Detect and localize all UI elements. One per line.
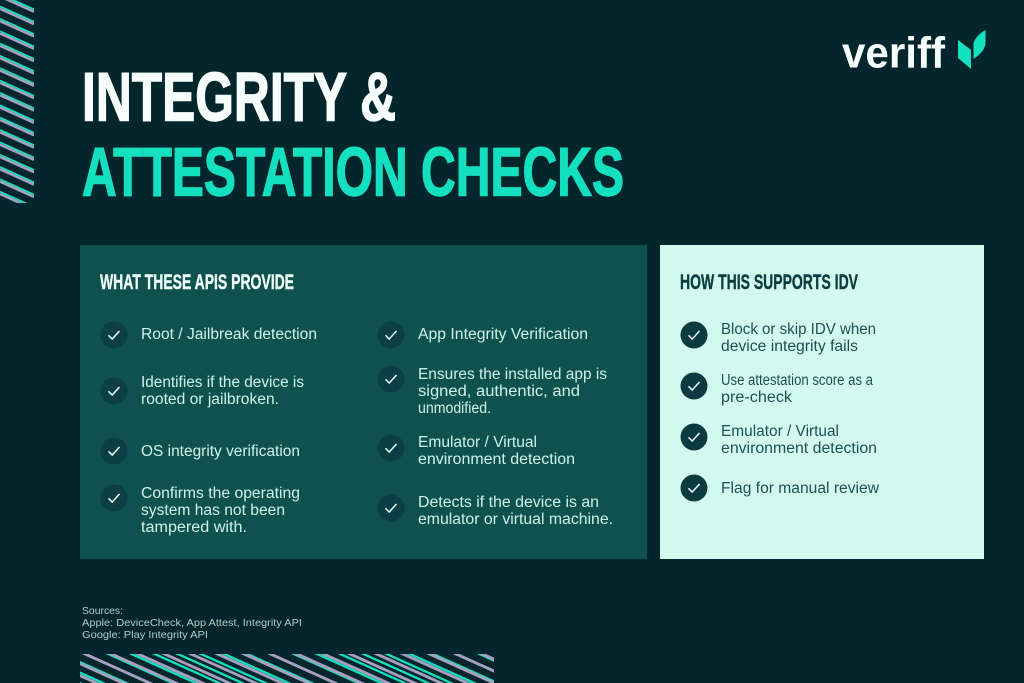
item: identifies	[100, 374, 304, 408]
item: detects: emulator or virtual machine.	[418, 511, 613, 528]
title	[82, 58, 624, 210]
logo: veriff: veriff	[842, 28, 945, 78]
item: ensures: Ensures the installed app is	[418, 366, 607, 383]
item: ensures: signed, authentic, and	[418, 383, 580, 400]
item: detects: Detects if the device is an	[418, 494, 599, 511]
title: ATTESTATION CHECKS	[82, 134, 624, 210]
item: block or skip: device integrity fails	[721, 338, 858, 355]
item: confirms	[100, 484, 300, 536]
item: app integrity	[378, 322, 588, 348]
item: ensures	[378, 366, 607, 417]
heading: HOW THIS SUPPORTS IDV	[680, 271, 858, 294]
item: emulator	[378, 434, 575, 468]
sources: Apple: DeviceCheck, App Attest, Integrity API	[82, 617, 302, 629]
icon: leaf mark	[958, 30, 986, 69]
item: emulator: Emulator / Virtual	[418, 434, 537, 451]
item: block or skip: Block or skip IDV when	[721, 321, 876, 338]
item: attestation score: pre-check	[721, 389, 792, 406]
item: identifies: Identifies if the device is	[141, 374, 304, 391]
item: OS integrity	[100, 438, 300, 464]
item: attestation score: Use attestation score as a	[721, 372, 873, 389]
item: app integrity: App Integrity Verification	[418, 326, 588, 343]
item: flag	[680, 474, 880, 502]
item: confirms: Confirms the operating	[141, 485, 300, 502]
item: flag: Flag for manual review	[721, 480, 880, 497]
item: block or skip	[680, 321, 876, 355]
item: attestation score	[680, 372, 873, 406]
item: ensures: unmodified.	[418, 400, 491, 417]
decorative stripes: left	[0, 0, 34, 209]
item: emulator	[680, 423, 877, 457]
decorative stripes: bottom	[80, 654, 494, 683]
title: INTEGRITY &	[82, 58, 396, 136]
item: emulator: environment detection	[418, 451, 575, 468]
item: confirms: tampered with.	[141, 519, 247, 536]
item: confirms: system has not been	[141, 502, 285, 519]
item: identifies: rooted or jailbroken.	[141, 391, 279, 408]
heading: WHAT THESE APIS PROVIDE	[100, 271, 294, 294]
sources	[82, 605, 302, 641]
panel: how this supports IDV	[660, 245, 984, 559]
item: emulator: environment detection	[721, 440, 877, 457]
item: emulator: Emulator / Virtual	[721, 423, 839, 440]
panel: what these APIs provide	[80, 245, 647, 559]
item: root / jailbreak	[100, 322, 317, 348]
item: detects	[378, 494, 613, 528]
item: OS integrity: OS integrity verification	[141, 443, 300, 460]
sources: Google: Play Integrity API	[82, 629, 208, 641]
item: root / jailbreak: Root / Jailbreak detection	[141, 326, 317, 343]
sources: Sources:	[82, 605, 123, 617]
